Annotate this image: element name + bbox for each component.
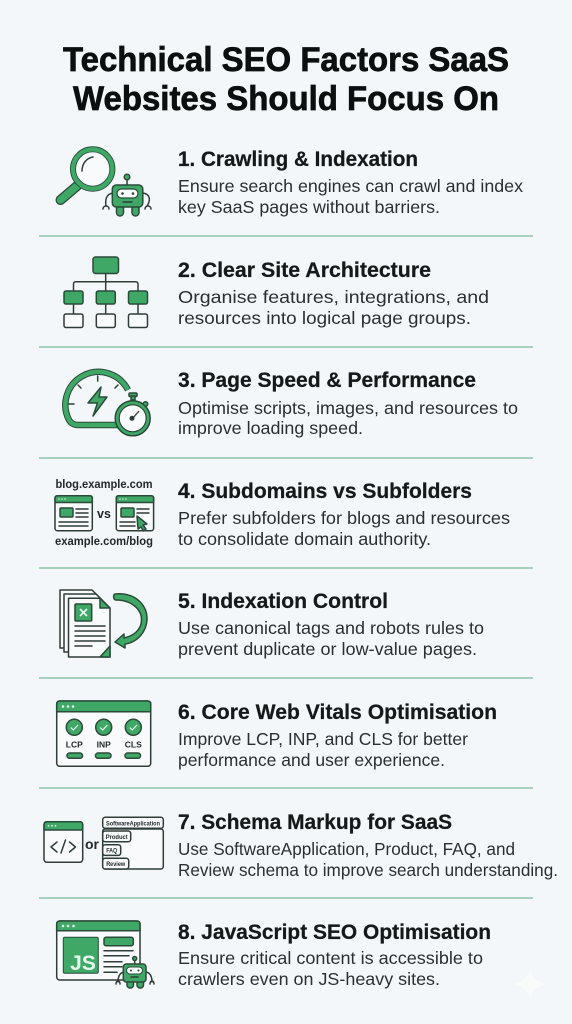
panel: core web vitals optimisation <box>57 700 497 770</box>
icon: code window and schema tags <box>44 817 163 869</box>
icon: site hierarchy <box>64 257 148 328</box>
description: crawlers even on JS-heavy sites. <box>178 969 440 989</box>
description <box>178 176 523 217</box>
description: improve loading speed. <box>178 418 363 438</box>
panel: schema markup for saas <box>44 810 558 880</box>
description: Optimise scripts, images, and resources to <box>178 398 518 418</box>
heading: 1. Crawling & Indexation <box>178 147 418 171</box>
icon: js window and robot <box>57 921 154 988</box>
heading: 8. JavaScript SEO Optimisation <box>178 920 491 944</box>
description: Review schema to improve search understanding. <box>178 860 558 880</box>
panel: clear site architecture <box>64 257 489 328</box>
description: Ensure critical content is accessible to <box>178 948 483 968</box>
description: Ensure search engines can crawl and index <box>178 176 523 196</box>
description <box>178 398 518 438</box>
icon: code window and schema tags: SoftwareApplication <box>106 822 160 828</box>
icon: code window and schema tags: FAQ <box>106 849 117 855</box>
description <box>178 287 489 328</box>
heading: 7. Schema Markup for SaaS <box>178 810 452 834</box>
description: to consolidate domain authority. <box>178 529 431 549</box>
heading: 6. Core Web Vitals Optimisation <box>178 700 497 724</box>
icon: stacked documents with return arrow <box>60 590 147 657</box>
description <box>178 618 484 659</box>
panel: crawling and indexation <box>60 147 523 217</box>
icon: speedometer and stopwatch <box>65 372 150 436</box>
title <box>63 41 509 118</box>
heading: 3. Page Speed & Performance <box>178 368 476 392</box>
heading: 4. Subdomains vs Subfolders <box>178 479 472 503</box>
description: performance and user experience. <box>178 750 445 770</box>
title: Websites Should Focus On <box>73 80 499 118</box>
description <box>178 729 468 770</box>
icon: core web vitals dashboard <box>57 701 151 766</box>
description: Use canonical tags and robots rules to <box>178 618 484 638</box>
panel: javascript seo optimisation <box>57 920 491 989</box>
icon: core web vitals dashboard: LCP <box>66 740 83 750</box>
icon: core web vitals dashboard: INP <box>97 740 111 750</box>
icon: two browser windows compared: example.com/blog <box>55 536 153 548</box>
icon: code window and schema tags: Review <box>106 862 125 868</box>
description <box>178 508 510 549</box>
description: prevent duplicate or low-value pages. <box>178 639 477 659</box>
icon: magnifying glass and robot <box>60 149 151 216</box>
description: Prefer subfolders for blogs and resources <box>178 508 510 528</box>
heading: 5. Indexation Control <box>178 589 388 613</box>
description <box>178 839 558 880</box>
icon: two browser windows compared: vs <box>97 507 111 521</box>
description: Use SoftwareApplication, Product, FAQ, and <box>178 839 515 859</box>
description: key SaaS pages without barriers. <box>178 197 440 217</box>
panel: indexation control <box>60 589 484 659</box>
icon: code window and schema tags: Product <box>106 835 128 841</box>
icon: code window and schema tags: or <box>85 836 100 852</box>
heading: 2. Clear Site Architecture <box>178 258 431 282</box>
icon: two browser windows compared: blog.example.com <box>56 479 152 491</box>
description: resources into logical page groups. <box>178 308 471 328</box>
panel: subdomains vs subfolders <box>55 479 510 549</box>
panel: page speed and performance <box>65 368 518 438</box>
description: Organise features, integrations, and <box>178 287 489 307</box>
icon: two browser windows compared <box>55 479 154 548</box>
description: Improve LCP, INP, and CLS for better <box>178 729 468 749</box>
title: Technical SEO Factors SaaS <box>63 41 509 79</box>
icon: js window and robot: JS <box>70 952 96 975</box>
description <box>178 948 483 989</box>
icon: core web vitals dashboard: CLS <box>125 740 142 750</box>
